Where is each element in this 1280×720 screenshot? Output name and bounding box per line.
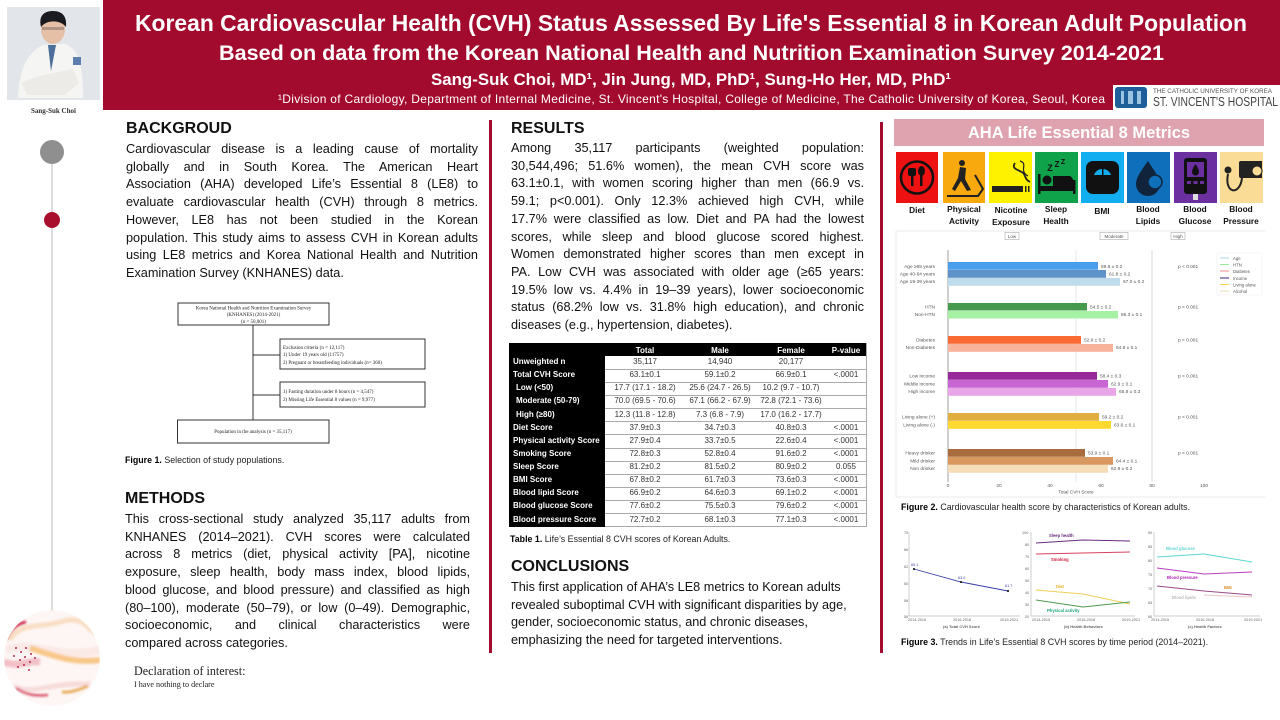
trend panel b: health behaviors: Diet xyxy=(1056,584,1065,589)
icon: BMI: BMI xyxy=(1094,206,1110,216)
x axis: 60 xyxy=(1098,483,1104,489)
icon: blood glucose: Blood xyxy=(1183,204,1207,214)
trend panel c: health factors: 65 xyxy=(1148,601,1152,605)
flowchart: figure 1: (n = 50,001) xyxy=(241,320,266,325)
icon: sleep health: Health xyxy=(1043,216,1069,226)
bar category labels: Low income xyxy=(909,374,935,380)
bars: diabetes xyxy=(948,336,1113,352)
chart: figure 2 bar chart xyxy=(896,230,1265,498)
table values: 63.1±0.1 xyxy=(629,370,661,379)
legend: Alcohol xyxy=(1233,289,1247,294)
bar category labels: HTN xyxy=(925,304,936,310)
divider: left xyxy=(489,120,492,653)
table header: P-value xyxy=(832,346,861,355)
icon: nicotine exposure: Exposure xyxy=(992,217,1030,227)
table values: 12.3 (11.8 - 12.8) xyxy=(615,410,676,419)
bar value labels: 59.8 ± 0.2 xyxy=(1101,264,1123,270)
p-values: p < 0.001 xyxy=(1178,264,1198,270)
table values: 81.2±0.2 xyxy=(629,462,661,471)
panel: results xyxy=(511,120,864,332)
x axis: 20 xyxy=(996,483,1002,489)
trend panel c: health factors: (c) Health Factors xyxy=(1188,624,1223,629)
chart: figure 3 trend lines xyxy=(904,531,1262,629)
trend panel b: health behaviors: 60 xyxy=(1025,567,1029,571)
legend: HTN xyxy=(1233,262,1242,268)
trend panel c: health factors: 2016-2018 xyxy=(1196,618,1214,622)
bar value labels: 64.4 ± 0.1 xyxy=(1116,458,1138,464)
results text: 30,544,496; 51.6% women), the mean CVH score was xyxy=(511,159,864,173)
bar value labels: 52.6 ± 0.2 xyxy=(1084,338,1106,344)
background text: Association (AHA) developed Life’s Essential 8 (LE8) to xyxy=(126,177,478,191)
row labels: Diet Score xyxy=(513,423,553,432)
bar category labels: High income xyxy=(908,389,935,395)
legend: Income xyxy=(1233,276,1248,281)
title: Based on data from the Korean National Health and Nutrition Examination Survey 2014-2021 xyxy=(219,42,1164,65)
results text: diseases (e.g., hypertension, diabetes). xyxy=(511,318,732,332)
bar value labels: 54.5 ± 0.2 xyxy=(1090,304,1112,310)
legend: Living alone xyxy=(1233,282,1257,288)
heading: background: BACKGROUD xyxy=(126,120,232,137)
trend panel c: health factors: Blood pressure xyxy=(1167,575,1198,580)
row labels: Unweighted n xyxy=(513,357,566,366)
title xyxy=(135,10,1247,65)
table values: 72.7±0.2 xyxy=(629,515,661,524)
table values: 0.055 xyxy=(836,462,857,471)
trend panel b: health behaviors: 20 xyxy=(1025,615,1029,619)
icon: sleep health xyxy=(1035,152,1078,226)
table values: 81.5±0.2 xyxy=(704,462,736,471)
panel: conclusions xyxy=(511,558,847,647)
table values: <.0001 xyxy=(834,515,859,524)
trend panel c: health factors: 80 xyxy=(1148,559,1152,563)
bar value labels: 62.9 ± 0.1 xyxy=(1111,382,1133,388)
conclusions text xyxy=(511,580,847,647)
panel: methods xyxy=(125,490,470,650)
results text: Women demonstrated higher scores than men except in xyxy=(511,247,864,261)
icon: sleep health: Sleep xyxy=(1045,204,1067,214)
bars: income xyxy=(948,372,1116,396)
heading: methods: METHODS xyxy=(125,490,205,507)
table values xyxy=(614,357,859,524)
icon: blood glucose: Glucose xyxy=(1179,216,1212,226)
table values: <.0001 xyxy=(834,501,859,510)
trend panel c: health factors: BMI xyxy=(1224,585,1232,590)
methods text xyxy=(125,512,470,650)
p-values: p < 0.001 xyxy=(1178,374,1198,380)
trend panel b: health behaviors: Smoking xyxy=(1051,557,1069,562)
background text: globally and in South Korea. The American Heart xyxy=(126,160,478,174)
row labels xyxy=(513,357,600,524)
timeline decoration with ornaments xyxy=(4,140,100,706)
table header: Male xyxy=(711,346,729,355)
table values: 72.8±0.3 xyxy=(629,449,661,458)
table values: 80.9±0.2 xyxy=(775,462,807,471)
trend panel b: health behaviors: 100 xyxy=(1022,531,1028,535)
bar value labels xyxy=(1084,264,1145,472)
table header: Total xyxy=(636,346,654,355)
row labels: Low (<50) xyxy=(516,383,553,392)
bar category labels: Mild drinker xyxy=(910,458,935,464)
trend panel b: health behaviors: (b) Health Behaviors xyxy=(1064,624,1104,629)
bar category labels: Age 19-39 years xyxy=(900,279,936,285)
bar value labels: 59.2 ± 0.2 xyxy=(1102,414,1124,420)
results text: 17.7% were classified as low. Diet and PA had the lowest xyxy=(511,212,864,226)
icon: diet xyxy=(896,152,938,215)
CVH category tags xyxy=(1005,232,1185,240)
bars: age xyxy=(948,262,1120,286)
conclusions text: gender, socioeconomic status, and chronic diseases, xyxy=(511,615,808,629)
banner: AHA Life Essential 8 Metrics xyxy=(894,119,1264,146)
trend panel c: health factors: 2019-2021 xyxy=(1244,618,1262,622)
background text: However, LE8 has not been studied in the Korean xyxy=(126,213,478,227)
authors: Sang-Suk Choi, MD¹, Jin Jung, MD, PhD¹, Sung-Ho Her, MD, PhD¹ xyxy=(431,71,951,89)
table values: <.0001 xyxy=(834,488,859,497)
icon: BMI xyxy=(1081,152,1124,216)
trend panel a: total CVH score: 2019-2021 xyxy=(1000,618,1018,622)
bar value labels: 63.6 ± 0.1 xyxy=(1114,422,1136,428)
trend panel c: health factors: 90 xyxy=(1148,531,1152,535)
trend panel b: health behaviors: 80 xyxy=(1025,543,1029,547)
bars: alcohol xyxy=(948,449,1113,473)
table values: 64.6±0.3 xyxy=(704,488,736,497)
flowchart: figure 1: (KNHANES) (2014-2021) xyxy=(227,313,281,318)
row labels: BMI Score xyxy=(513,475,553,484)
flowchart: figure 1: Population in the analysis (n = 35,117) xyxy=(214,430,292,435)
trend panel b: health behaviors: Sleep health xyxy=(1049,533,1074,538)
conclusions text: emphasizing the need for targeted interventions. xyxy=(511,633,783,647)
methods text: socioeconomic, and clinical characteristics were xyxy=(125,618,470,632)
table values: 20,177 xyxy=(779,357,804,366)
table values: 68.1±0.3 xyxy=(704,515,736,524)
table values: 72.8 (72.1 - 73.6) xyxy=(760,396,822,405)
hospital logo xyxy=(1113,85,1280,110)
bar value labels: 62.9 ± 0.2 xyxy=(1111,466,1133,472)
bar category labels: Living alone (+) xyxy=(902,414,935,420)
declaration of interest: I have nothing to declare xyxy=(134,680,214,689)
table values: 40.8±0.3 xyxy=(775,423,807,432)
x axis xyxy=(947,483,1208,496)
divider: right xyxy=(880,122,883,653)
trend panel b: health behaviors: 40 xyxy=(1025,591,1029,595)
background text: using LE8 metrics and Korea National Health and Nutrition xyxy=(126,248,478,262)
bar value labels: 61.8 ± 0.2 xyxy=(1109,272,1131,278)
trend panel a: total CVH score: 58 xyxy=(904,599,908,603)
table values: 75.5±0.3 xyxy=(704,501,736,510)
row labels: Total CVH Score xyxy=(513,370,576,379)
bar category labels: Non drinker xyxy=(910,466,935,472)
legend: Age xyxy=(1233,256,1241,261)
table values: 33.7±0.5 xyxy=(704,436,736,445)
x axis: 80 xyxy=(1149,483,1155,489)
flowchart: figure 1: 2) Missing Life Essential 8 values (n = 9,977) xyxy=(283,398,375,403)
table values: 37.9±0.3 xyxy=(629,423,661,432)
results text: scores, while sleep and blood glucose scored highest. xyxy=(511,230,864,244)
icon: sleep health: Z xyxy=(1061,159,1066,166)
presenter name: Sang-Suk Choi xyxy=(31,107,76,115)
trend panel a: total CVH score: 2016-2018 xyxy=(953,618,971,622)
trend panel a: total CVH score: 63.0 xyxy=(958,576,965,580)
row labels: High (≥80) xyxy=(516,410,555,419)
caption: figure 3: Figure 3. Trends in Life’s Essential 8 CVH scores by time period (2014–2021). xyxy=(901,637,1208,647)
trend panel a: total CVH score: 70 xyxy=(904,531,908,535)
title: Korean Cardiovascular Health (CVH) Status Assessed By Life's Essential 8 in Korean Adult Population xyxy=(135,10,1247,36)
flowchart: figure 1 xyxy=(177,302,426,444)
declaration of interest xyxy=(134,664,245,689)
x axis: Total CVH Score xyxy=(1058,490,1094,496)
flowchart: figure 1: Korea National Health and Nutrition Examination Survey xyxy=(196,306,312,312)
bar category labels: Non-HTN xyxy=(915,312,936,318)
results text: 63.1±0.1, with women scoring higher than men (66.9 vs. xyxy=(511,176,864,190)
caption: table 1: Table 1. Life’s Essential 8 CVH scores of Korean Adults. xyxy=(510,534,730,544)
bar category labels: Living alone (-) xyxy=(903,422,935,428)
bars: living status xyxy=(948,413,1111,429)
flowchart: figure 1: 2) Pregnant or breastfeeding individuals (n= 360) xyxy=(283,361,382,366)
bar value labels: 67.0 ± 0.2 xyxy=(1123,279,1145,285)
trend panel b: health behaviors: 50 xyxy=(1025,579,1029,583)
bar category labels: Heavy drinker xyxy=(905,450,935,456)
bars: hypertension xyxy=(948,303,1118,318)
trend panel a: total CVH score: 56 xyxy=(904,615,908,619)
table values: 17.7 (17.1 - 18.2) xyxy=(614,383,676,392)
table values: 66.9±0.2 xyxy=(629,488,661,497)
background text xyxy=(126,142,478,280)
bar category labels: Middle income xyxy=(904,382,935,388)
trend panel a: total CVH score: 65.1 xyxy=(911,563,918,567)
methods text: compared across categories. xyxy=(125,636,288,650)
table values: 70.0 (69.5 - 70.6) xyxy=(614,396,676,405)
icon: sleep health: Z xyxy=(1055,160,1060,169)
table header xyxy=(636,346,861,355)
table values: <.0001 xyxy=(834,370,859,379)
table 1: CVH scores xyxy=(509,343,867,527)
trend panel c: health factors: 75 xyxy=(1148,573,1152,577)
icon: physical activity: Physical xyxy=(947,204,981,214)
bar category labels: Diabetes xyxy=(916,338,936,344)
methods text: exposure, sleep health, body mass index, blood lipids, xyxy=(125,565,470,579)
legend: Diabetes xyxy=(1233,269,1250,274)
conclusions text: revealed suboptimal CVH with significant disparities by age, xyxy=(511,598,847,612)
trend panel b: health behaviors: Physical activity xyxy=(1047,608,1080,613)
caption: figure 1: Figure 1. Selection of study populations. xyxy=(125,455,284,465)
bar value labels: 64.8 ± 0.1 xyxy=(1116,345,1138,351)
p-values: p < 0.001 xyxy=(1178,304,1198,310)
row labels: Moderate (50-79) xyxy=(516,396,580,405)
declaration of interest: Declaration of interest: xyxy=(134,664,245,678)
trend panel a: total CVH score: 2014-2015 xyxy=(908,618,926,622)
background text: Examination Survey (KNHANES) data. xyxy=(126,266,344,280)
table values: <.0001 xyxy=(834,475,859,484)
icon: nicotine exposure xyxy=(989,152,1032,227)
affiliation: ¹Division of Cardiology, Department of Internal Medicine, St. Vincent's Hospital, College of Medicine, The Catholic University of Korea, Seoul, Korea xyxy=(278,92,1105,106)
p-values: p < 0.001 xyxy=(1178,450,1198,456)
icon: blood lipids xyxy=(1127,152,1170,226)
header banner xyxy=(103,0,1280,110)
table values: 27.9±0.4 xyxy=(629,436,661,445)
results text xyxy=(511,141,864,332)
methods text: (80–100), moderate (50–79), or low (0–49). Demographic, xyxy=(125,601,470,615)
results text: 59.1; p<0.001). Only 12.3% achieved high CVH, while xyxy=(511,194,864,208)
icon: patterned ball xyxy=(4,610,100,706)
table values: 77.6±0.2 xyxy=(629,501,661,510)
background text: population. This study aims to assess CVH in Korean adults xyxy=(126,231,478,245)
trend panel b: health behaviors: 2016-2018 xyxy=(1077,618,1095,622)
flowchart: figure 1: 1) Fasting duration under 8 hours (n = 4,547) xyxy=(283,390,374,395)
heading: conclusions: CONCLUSIONS xyxy=(511,558,629,575)
row labels: Physical activity Score xyxy=(513,436,600,445)
bar value labels: 65.8 ± 0.3 xyxy=(1119,389,1141,395)
conclusions text: This first application of AHA’s LE8 metrics to Korean adults xyxy=(511,580,841,594)
trend panel a: total CVH score: 60 xyxy=(904,582,908,586)
legend xyxy=(1217,253,1262,295)
icon: sleep health: Z xyxy=(1047,163,1053,173)
hospital logo: THE CATHOLIC UNIVERSITY OF KOREA xyxy=(1153,88,1273,95)
table values: 25.6 (24.7 - 26.5) xyxy=(689,383,751,392)
row labels: Blood lipid Score xyxy=(513,488,579,497)
bar value labels: 66.3 ± 0.1 xyxy=(1121,312,1143,318)
table values: 91.6±0.2 xyxy=(775,449,807,458)
row labels: Blood glucose Score xyxy=(513,501,593,510)
results text: Among 35,117 participants (weighted population: xyxy=(511,141,864,155)
table values: 67.8±0.2 xyxy=(629,475,661,484)
trend panel b: health behaviors xyxy=(1022,531,1140,629)
row labels: Sleep Score xyxy=(513,462,559,471)
table values: 73.6±0.3 xyxy=(775,475,807,484)
trend panel c: health factors: Blood lipids xyxy=(1172,595,1197,600)
icon row: eight metrics xyxy=(896,152,1263,227)
x axis: 40 xyxy=(1047,483,1053,489)
trend panel b: health behaviors: 2014-2015 xyxy=(1032,618,1050,622)
bar value labels: 58.4 ± 0.3 xyxy=(1100,374,1122,380)
trend panel a: total CVH score xyxy=(904,531,1020,629)
icon: blood pressure xyxy=(1220,152,1263,226)
bar value labels: 53.9 ± 0.1 xyxy=(1088,450,1110,456)
table values: 67.1 (66.2 - 67.9) xyxy=(689,396,751,405)
table values: 7.3 (6.8 - 7.9) xyxy=(696,410,744,419)
caption: figure 2: Figure 2. Cardiovascular health score by characteristics of Korean adults. xyxy=(901,502,1190,512)
CVH category tags: Moderate xyxy=(1104,234,1124,239)
background text: evaluate cardiovascular health (CVH) through 8 metrics. xyxy=(126,195,478,209)
trend panel a: total CVH score: (a) Total CVH Score xyxy=(943,624,981,629)
p-values xyxy=(1178,264,1198,456)
icon: blood pressure: Blood xyxy=(1229,204,1253,214)
trend panel a: total CVH score: 62 xyxy=(904,565,908,569)
table values: 61.7±0.3 xyxy=(704,475,736,484)
table values: 52.8±0.4 xyxy=(704,449,736,458)
table values: <.0001 xyxy=(834,436,859,445)
methods text: blood glucose, and blood pressure) and classified as high xyxy=(125,583,470,597)
icon: diet: Diet xyxy=(909,205,925,215)
p-values: p < 0.001 xyxy=(1178,414,1198,420)
trend panel b: health behaviors: 30 xyxy=(1025,603,1029,607)
table values: 66.9±0.1 xyxy=(775,370,807,379)
table values: 34.7±0.3 xyxy=(704,423,736,432)
trend panel c: health factors xyxy=(1148,531,1262,629)
trend panel b: health behaviors: 2019-2021 xyxy=(1122,618,1140,622)
bar category labels: Non-Diabetes xyxy=(906,345,936,351)
icon: blood pressure: Pressure xyxy=(1223,216,1259,226)
icon: physical activity: Activity xyxy=(949,216,979,226)
icon: nicotine exposure: Nicotine xyxy=(995,205,1028,215)
table values: 35,117 xyxy=(633,357,657,366)
trend panel c: health factors: Blood glucose xyxy=(1166,546,1196,551)
table values: 10.2 (9.7 - 10.7) xyxy=(763,383,820,392)
icon: blood glucose xyxy=(1174,152,1217,226)
table values: 69.1±0.2 xyxy=(775,488,807,497)
bar category labels xyxy=(900,264,936,472)
bar category labels: Age 40-64 years xyxy=(900,272,936,278)
panel: background xyxy=(126,120,478,280)
icon: blood lipids: Blood xyxy=(1136,204,1160,214)
flowchart: figure 1: 1) Under 19 years old (11757) xyxy=(283,353,344,358)
trend panel c: health factors: 60 xyxy=(1148,615,1152,619)
methods text: KNHANES (2014–2021). CVH scores were calculated xyxy=(125,530,470,544)
table values: <.0001 xyxy=(834,449,859,458)
trend panel c: health factors: 2014-2015 xyxy=(1151,618,1169,622)
CVH category tags: Low xyxy=(1008,234,1017,239)
table values: 79.6±0.2 xyxy=(775,501,807,510)
table values: <.0001 xyxy=(834,423,859,432)
trend panel c: health factors: 85 xyxy=(1148,545,1152,549)
banner: AHA Life Essential 8 Metrics: AHA Life Essential 8 Metrics xyxy=(968,124,1190,142)
table values: 14,940 xyxy=(708,357,733,366)
bar category labels: Age ≥65 years xyxy=(904,264,936,270)
trend panel b: health behaviors: 70 xyxy=(1025,555,1029,559)
background text: Cardiovascular disease is a leading cause of mortality xyxy=(126,142,478,156)
table values: 22.6±0.4 xyxy=(775,436,807,445)
trend panel a: total CVH score: 66 xyxy=(904,548,908,552)
row labels: Smoking Score xyxy=(513,449,572,458)
p-values: p < 0.001 xyxy=(1178,338,1198,344)
icon: blood lipids: Lipids xyxy=(1136,216,1161,226)
icon: physical activity xyxy=(943,152,985,226)
x axis: 0 xyxy=(947,483,950,489)
methods text: This cross-sectional study analyzed 35,117 adults from xyxy=(125,512,470,526)
trend panel c: health factors: 70 xyxy=(1148,587,1152,591)
row labels: Blood pressure Score xyxy=(513,515,597,524)
presenter photo xyxy=(7,7,100,100)
heading: results: RESULTS xyxy=(511,120,584,137)
trend panel a: total CVH score: 61.7 xyxy=(1005,584,1012,588)
table values: 17.0 (16.2 - 17.7) xyxy=(760,410,822,419)
flowchart: figure 1: Exclusion criteria (n = 12,117) xyxy=(283,346,345,351)
table header: Female xyxy=(777,346,805,355)
table values: 77.1±0.3 xyxy=(775,515,807,524)
results text: 19.5% low vs. 4.4% in 19–39 years), lower socioeconomic xyxy=(511,283,864,297)
table values: 59.1±0.2 xyxy=(704,370,736,379)
x axis: 100 xyxy=(1200,483,1208,489)
methods text: across 8 metrics (diet, physical activity [PA], nicotine xyxy=(125,547,470,561)
results text: PA. Low CVH was associated with older age (≥65 years: xyxy=(511,265,864,279)
results text: status (68.2% low vs. 31.8% high education), and chronic xyxy=(511,300,864,314)
CVH category tags: High xyxy=(1173,234,1183,239)
